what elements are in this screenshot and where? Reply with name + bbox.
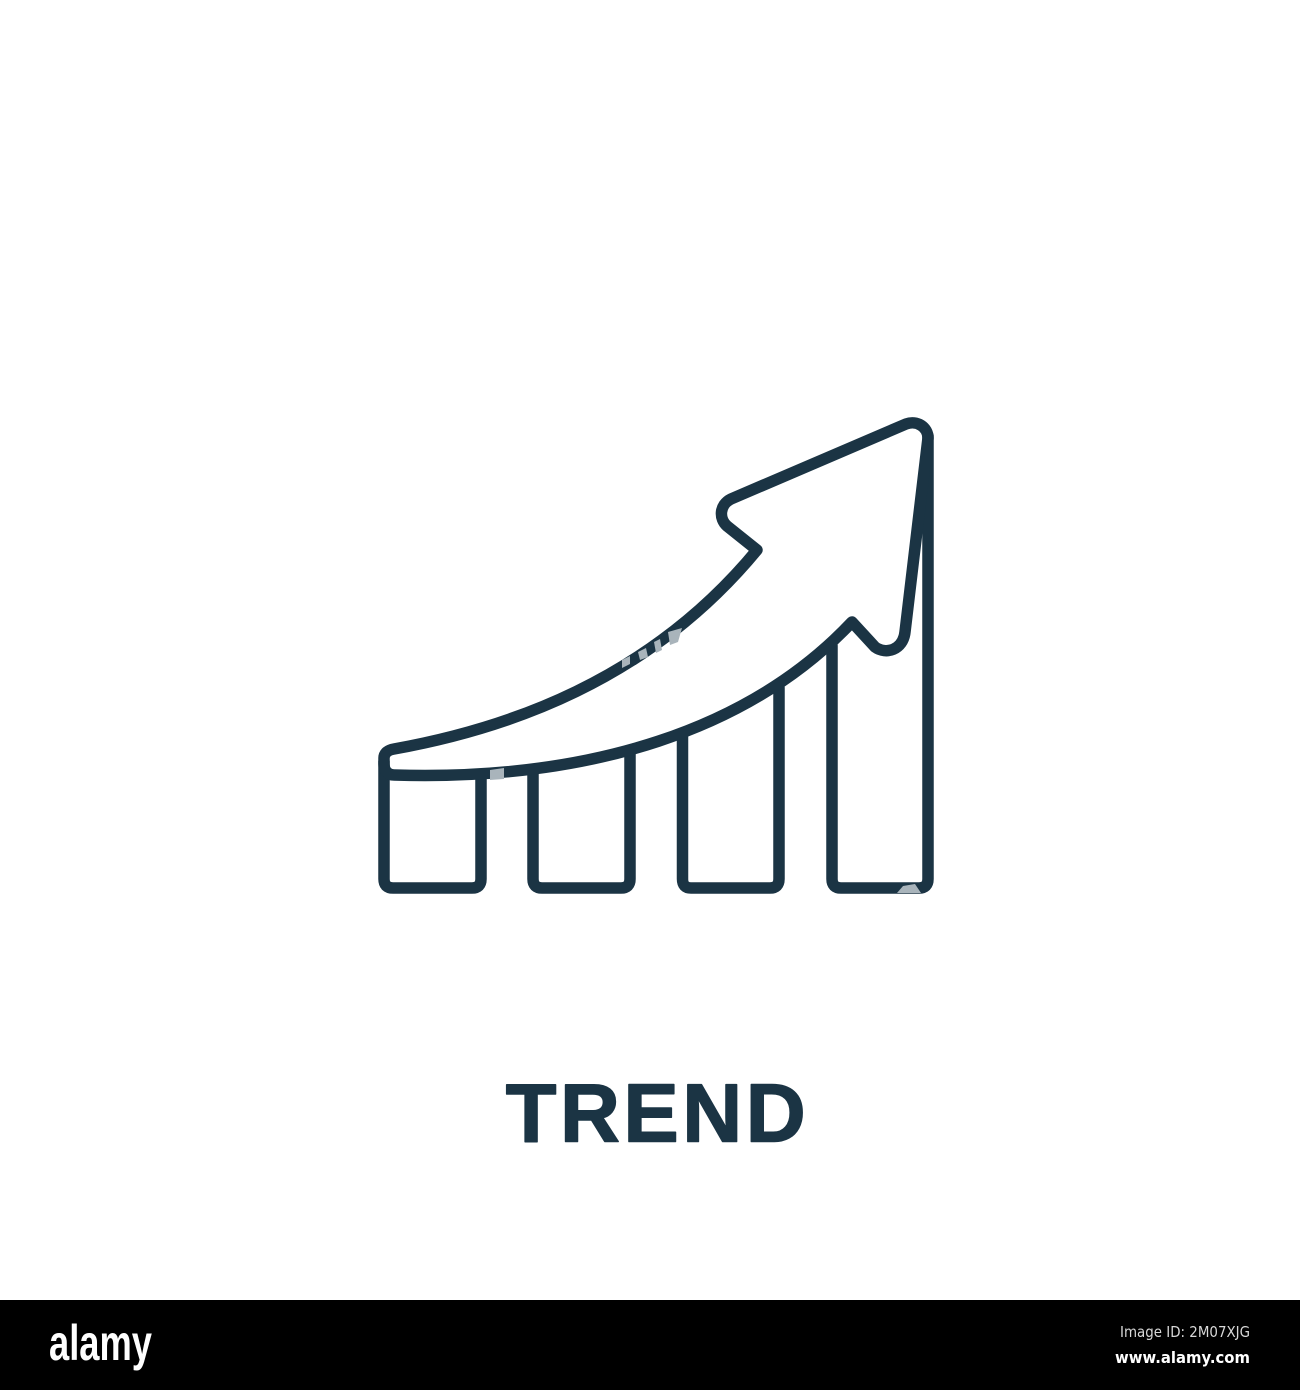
image id: Image ID: 2M07XJG bbox=[1120, 1323, 1250, 1341]
bar 3 bbox=[682, 688, 779, 888]
bar 4 bbox=[832, 436, 928, 888]
icon: trend bar chart with rising arrow bbox=[384, 423, 928, 888]
footer bar bbox=[0, 1300, 1300, 1390]
watermark fragments bbox=[490, 628, 921, 893]
bar 2 bbox=[533, 753, 630, 888]
website: www.alamy.com bbox=[1115, 1348, 1250, 1367]
footer logo: alamy: alamy bbox=[49, 1315, 152, 1371]
rising arrow bbox=[384, 423, 928, 775]
bar 1 bbox=[384, 762, 481, 888]
title: TREND: TREND bbox=[506, 1066, 809, 1160]
